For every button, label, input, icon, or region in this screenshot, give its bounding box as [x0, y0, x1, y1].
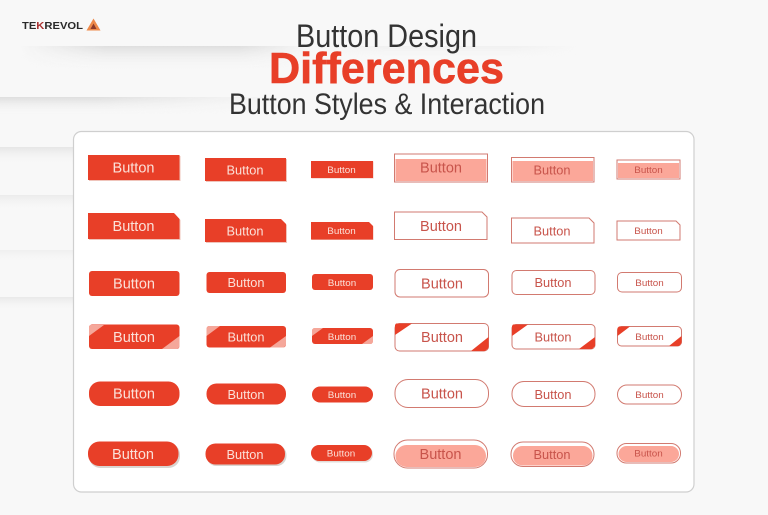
panel: button grid card [74, 132, 694, 492]
button: soft pill outline medium [512, 382, 595, 406]
button: angled corners filled large [89, 324, 180, 349]
button: soft pill filled large [89, 382, 180, 406]
button: angled corners filled small: Button [328, 332, 356, 343]
button: square pressed large: Button [420, 160, 462, 176]
button: cut corner filled medium: Button [226, 224, 264, 238]
button: square pressed small [617, 160, 680, 179]
button: square pressed large [394, 154, 488, 182]
button: soft pill outline small [618, 385, 682, 404]
button: angled corners filled medium [206, 326, 286, 348]
button: cut corner outline medium [512, 218, 594, 243]
button: rounded outline medium: Button [534, 275, 572, 290]
button: square pressed medium: Button [534, 162, 570, 178]
button: pill shadow filled medium [206, 444, 286, 466]
logo: Tekrevol [22, 18, 100, 32]
button: soft pill outline small: Button [635, 390, 664, 401]
button: angled corners filled large: Button [113, 330, 155, 346]
button: rounded filled medium: Button [228, 275, 264, 290]
button: angled corners filled medium: Button [228, 330, 264, 344]
button: rounded outline small [618, 272, 682, 292]
button: soft pill outline large [395, 380, 488, 408]
button: square pressed medium [512, 158, 594, 182]
button: soft pill filled medium [206, 384, 286, 404]
button: cut corner filled small: Button [327, 226, 356, 237]
button: pill pressed medium [511, 442, 594, 466]
button: pill shadow filled large: Button [112, 447, 154, 463]
button: angled corners outline small [618, 326, 682, 346]
heading: Button Styles & Interaction: Button Styles & Interaction [229, 88, 545, 121]
button: cut corner outline large [394, 212, 487, 240]
button: rounded outline large: Button [421, 276, 463, 292]
button: angled corners outline large: Button [421, 330, 463, 346]
button: square filled medium [205, 158, 287, 182]
button: square filled medium: Button [226, 162, 264, 178]
button: cut corner filled medium [205, 219, 287, 243]
button: cut corner filled large [88, 213, 180, 240]
button: rounded filled medium [206, 272, 286, 293]
button: cut corner filled small [311, 222, 374, 240]
button: pill pressed medium: Button [534, 447, 570, 462]
button: square filled small: Button [327, 165, 356, 176]
button: angled corners outline large [395, 324, 488, 351]
button: soft pill outline medium: Button [534, 387, 572, 402]
button: pill shadow filled small: Button [327, 448, 355, 460]
button: soft pill filled medium: Button [228, 387, 264, 402]
button: pill pressed large: Button [420, 447, 462, 463]
button: soft pill filled small: Button [328, 390, 356, 401]
button: cut corner outline small: Button [634, 226, 663, 237]
button: pill shadow filled medium: Button [226, 447, 264, 462]
button: cut corner outline small [617, 221, 680, 240]
button: rounded filled small: Button [328, 278, 356, 289]
heading: Button Design: Button Design [296, 18, 477, 54]
heading: Differences: Differences [269, 44, 504, 93]
button: cut corner outline large: Button [420, 219, 462, 235]
title [229, 18, 545, 121]
button: soft pill outline large: Button [421, 386, 463, 402]
button: pill pressed small [617, 444, 680, 463]
button: rounded filled small [312, 274, 373, 290]
button: soft pill filled small [312, 386, 373, 402]
button: square filled large [88, 155, 180, 181]
logo: Tekrevol: TEKREVOL [22, 20, 84, 32]
button: cut corner filled large: Button [112, 219, 154, 235]
button: square filled small [311, 161, 374, 178]
button: pill shadow filled large [88, 442, 180, 468]
button: angled corners outline small: Button [635, 332, 664, 343]
button: angled corners outline medium: Button [534, 330, 572, 344]
button: cut corner outline medium: Button [534, 224, 570, 238]
button: angled corners outline medium [512, 324, 595, 349]
button: rounded outline small: Button [635, 278, 664, 289]
button: square pressed small: Button [634, 165, 663, 176]
button: rounded outline large [395, 270, 488, 297]
button: soft pill filled large: Button [113, 386, 155, 402]
button: rounded filled large: Button [113, 276, 155, 292]
button: angled corners filled small [312, 328, 373, 344]
button: rounded filled large [89, 271, 180, 296]
button: pill pressed small: Button [634, 448, 663, 460]
button: square filled large: Button [112, 160, 154, 176]
background with paper shadows [0, 46, 286, 301]
button: pill shadow filled small [311, 445, 373, 462]
button: pill pressed large [394, 440, 488, 468]
button: rounded outline medium [512, 270, 595, 294]
